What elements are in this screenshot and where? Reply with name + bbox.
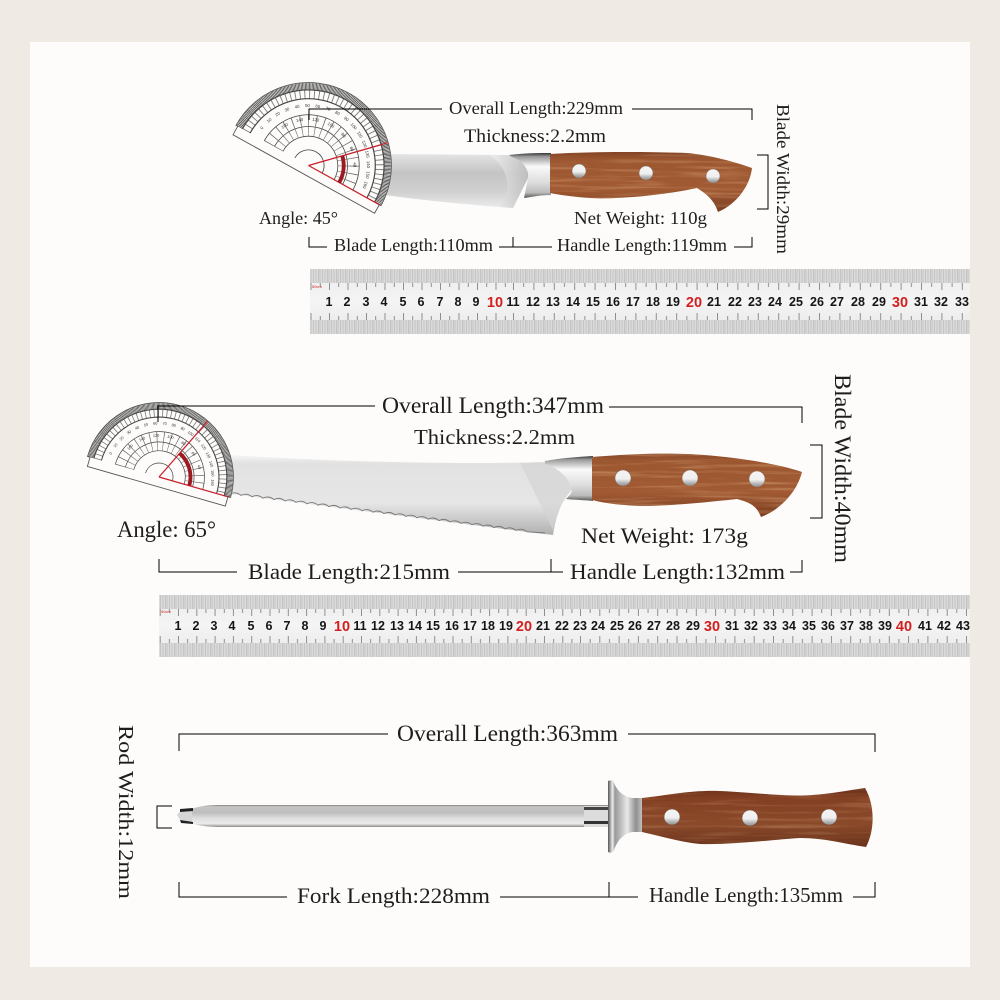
protractor 2: 65 degree: 140	[138, 436, 146, 442]
protractor 1: 45 degree: 60	[315, 103, 321, 109]
ruler 1 numbers: 11	[506, 295, 520, 309]
ruler 1 numbers: 28	[851, 295, 865, 309]
protractor 2: 65 degree: 130	[205, 451, 211, 459]
ruler 2 numbers: 5	[248, 619, 255, 633]
ruler 1 numbers: 26	[810, 295, 824, 309]
ruler 1 numbers: 1	[326, 295, 333, 309]
guard	[608, 780, 643, 853]
protractor 1: 45 degree: 60	[349, 146, 355, 153]
handle	[592, 454, 802, 517]
ruler 2 numbers: 33	[763, 619, 777, 633]
ruler 2 numbers: 2	[193, 619, 200, 633]
ruler 1 numbers: 18	[646, 295, 660, 309]
ruler 1	[310, 269, 970, 334]
knife 2: bread knife photo	[228, 450, 804, 535]
ruler 2 numbers: 37	[840, 619, 854, 633]
ruler 1 numbers: 10	[487, 295, 503, 311]
protractor 1: 45 degree: 80	[340, 132, 347, 139]
protractor 1: 45 degree: 10	[266, 116, 273, 124]
protractor 2: 65 degree	[85, 385, 251, 507]
ruler 1 numbers: 7	[437, 295, 444, 309]
ruler 2 numbers: 21	[536, 619, 550, 633]
protractor 1: 45 degree: 160	[280, 121, 290, 130]
annotations knife 2: Net Weight: 173g	[581, 523, 748, 548]
ruler 1 numbers: 6	[418, 295, 425, 309]
annotations honing rod: Handle Length:135mm	[649, 883, 843, 907]
annotations knife 2: Angle: 65°	[117, 517, 216, 542]
ruler 1 numbers: 24	[768, 295, 782, 309]
ruler 1 numbers: 32	[934, 295, 948, 309]
ruler 2 numbers: 11	[353, 619, 367, 633]
ruler 2 numbers: 26	[628, 619, 642, 633]
annotations knife 1: Overall Length:229mm	[449, 98, 623, 118]
ruler 2 numbers: 41	[918, 619, 932, 633]
protractor 1: 45 degree: 140	[366, 161, 371, 169]
ruler 2 numbers: 27	[647, 619, 661, 633]
annotations honing rod: Rod Width:12mm	[114, 725, 138, 899]
ruler 2 numbers: 43	[956, 619, 970, 633]
ruler 2: 50cm	[161, 609, 171, 614]
protractor 1: 45 degree: 80	[334, 110, 341, 117]
serration	[230, 493, 545, 533]
protractor 1: 45 degree: 40	[352, 162, 357, 168]
annotations knife 1: Blade Width:29mm	[773, 104, 793, 254]
ruler 1 numbers: 31	[914, 295, 928, 309]
ruler 2 numbers: 3	[211, 619, 218, 633]
rod tip	[177, 808, 192, 824]
protractor 2: 65 degree: 80	[180, 441, 186, 447]
protractor 1: 45 degree: 50	[305, 103, 310, 108]
ruler 2 numbers: 8	[302, 619, 309, 633]
annotations knife 2: Overall Length:347mm	[382, 393, 604, 418]
ruler 2 numbers: 29	[686, 619, 700, 633]
ruler 1 numbers: 14	[566, 295, 580, 309]
ruler 1 numbers: 16	[606, 295, 620, 309]
ruler 2 numbers: 13	[390, 619, 404, 633]
ruler 1 numbers: 30	[892, 295, 908, 311]
ruler 2 numbers: 16	[445, 619, 459, 633]
ruler 1 numbers: 5	[400, 295, 407, 309]
protractor 2: 65 degree: 110	[194, 436, 201, 443]
protractor 2: 65 degree: 160	[127, 444, 134, 451]
ruler 2 numbers: 42	[937, 619, 951, 633]
ruler 2 numbers: 14	[408, 619, 422, 633]
protractor 2: 65 degree: 0	[109, 452, 113, 455]
annotations knife 2: Thickness:2.2mm	[414, 425, 575, 449]
ruler 1 numbers: 13	[546, 295, 560, 309]
protractor 1: 45 degree: 150	[365, 171, 371, 179]
ruler 2 numbers: 36	[821, 619, 835, 633]
ruler 2 numbers: 18	[481, 619, 495, 633]
protractor 1: 45 degree: 20	[274, 110, 281, 117]
ruler 1 numbers: 19	[666, 295, 680, 309]
protractor 2: 65 degree: 100	[187, 430, 194, 437]
protractor 2: 65 degree: 20	[119, 436, 125, 441]
protractor 2: 65 degree: 60	[153, 421, 158, 426]
ruler 2 numbers: 40	[896, 619, 912, 635]
ruler 1 numbers: 20	[686, 295, 702, 311]
rivets	[664, 809, 837, 826]
protractor 2: 65 degree: 10	[113, 443, 119, 448]
bevel	[490, 155, 528, 208]
ruler 1 numbers: 23	[748, 295, 762, 309]
protractor 2: 65 degree: 80	[171, 423, 176, 428]
rod shaft	[191, 805, 610, 827]
handle	[550, 150, 755, 215]
ruler 1 numbers: 25	[789, 295, 803, 309]
protractor 1: 45 degree	[231, 53, 421, 214]
annotations knife 1	[259, 98, 793, 255]
annotations knife 2: Blade Length:215mm	[248, 559, 450, 584]
protractor 2: 65 degree: 70	[162, 422, 167, 426]
ruler 2 numbers: 22	[555, 619, 569, 633]
ruler 1 numbers: 12	[526, 295, 540, 309]
ruler 2 numbers: 20	[516, 619, 532, 635]
ruler 1 numbers: 17	[626, 295, 640, 309]
blade	[375, 154, 528, 208]
red angle marker	[308, 114, 408, 205]
ruler 2 numbers: 30	[704, 619, 720, 635]
protractor 1: 45 degree: 120	[361, 140, 368, 149]
protractor 2: 65 degree: 30	[126, 430, 132, 436]
ruler 1 numbers: 8	[455, 295, 462, 309]
ruler 1 numbers: 9	[473, 295, 480, 309]
protractor 2: 65 degree: 60	[190, 451, 196, 457]
protractor 2: 65 degree: 150	[210, 470, 215, 477]
bolster	[545, 456, 593, 501]
ruler 2 numbers: 38	[859, 619, 873, 633]
red angle marker	[159, 412, 247, 497]
protractor 2: 65 degree: 160	[210, 479, 215, 486]
protractor 2: 65 degree: 120	[200, 443, 207, 451]
ruler 2 numbers: 9	[320, 619, 327, 633]
ruler 2 numbers: 4	[229, 619, 236, 633]
ruler 2 numbers: 1	[175, 619, 182, 633]
ruler 1 numbers: 3	[363, 295, 370, 309]
ruler 1 numbers: 21	[707, 295, 721, 309]
rivets	[615, 470, 765, 487]
serrated blade	[228, 455, 572, 535]
annotations knife 1: Net Weight: 110g	[574, 208, 707, 228]
protractor 1: 45 degree: 110	[356, 130, 364, 139]
ruler 2	[159, 595, 970, 657]
ruler 2 numbers: 19	[499, 619, 513, 633]
ruler 1 numbers: 22	[728, 295, 742, 309]
protractor 1: 45 degree: 100	[327, 121, 336, 129]
ruler 1 numbers: 2	[344, 295, 351, 309]
annotations knife 1: Angle: 45°	[259, 208, 338, 228]
protractor 2: 65 degree: 40	[197, 464, 201, 470]
ruler 1 numbers: 27	[830, 295, 844, 309]
annotations honing rod: Overall Length:363mm	[397, 721, 618, 746]
ruler 2 numbers: 34	[782, 619, 796, 633]
ruler 1 numbers: 29	[872, 295, 886, 309]
ruler 2 numbers: 17	[463, 619, 477, 633]
ruler 2 numbers: 7	[284, 619, 291, 633]
annotations knife 1: Thickness:2.2mm	[464, 126, 606, 147]
annotations knife 2: Blade Width:40mm	[830, 374, 855, 563]
ruler 2 numbers: 24	[591, 619, 605, 633]
protractor 2: 65 degree: 120	[153, 434, 159, 438]
ruler 2 numbers: 6	[266, 619, 273, 633]
protractor 1: 45 degree: 120	[312, 117, 320, 123]
annotations knife 2	[117, 374, 855, 584]
ruler 2 numbers: 28	[666, 619, 680, 633]
protractor 1: 45 degree: 100	[350, 122, 358, 131]
annotations knife 2: Handle Length:132mm	[570, 559, 785, 584]
ruler 1 numbers: 4	[381, 295, 388, 309]
annotations knife 1: Handle Length:119mm	[557, 235, 727, 255]
rivets	[572, 164, 720, 183]
ruler 1 numbers: 33	[955, 295, 969, 309]
ruler 2 numbers	[175, 619, 970, 635]
ruler 1 numbers	[326, 295, 969, 311]
ruler 2 numbers: 10	[334, 619, 350, 635]
knife 1: paring knife photo	[386, 152, 752, 212]
ruler 2 numbers: 23	[573, 619, 587, 633]
protractor 2: 65 degree: 90	[180, 426, 185, 432]
ruler 2 numbers: 39	[878, 619, 892, 633]
ruler 1 numbers: 15	[586, 295, 600, 309]
handle	[642, 788, 873, 847]
ruler 2 numbers: 25	[610, 619, 624, 633]
protractor 1: 45 degree: 0	[259, 125, 265, 130]
protractor 2: 65 degree: 50	[143, 423, 149, 428]
protractor 2: 65 degree: 140	[208, 460, 214, 468]
annotations honing rod	[114, 721, 875, 908]
blade bevel	[520, 462, 572, 530]
ruler 2 numbers: 32	[744, 619, 758, 633]
annotations knife 1: Blade Length:110mm	[334, 235, 493, 255]
ruler 2 numbers: 15	[426, 619, 440, 633]
annotations honing rod: Fork Length:228mm	[297, 883, 490, 908]
protractor 1: 45 degree: 90	[343, 115, 350, 123]
protractor 1: 45 degree: 30	[284, 106, 291, 113]
rod collar	[584, 806, 609, 827]
protractor 1: 45 degree: 140	[296, 117, 304, 123]
protractor 2: 65 degree: 100	[167, 435, 174, 440]
protractor 2: 65 degree: 40	[134, 425, 140, 431]
bolster	[509, 153, 551, 198]
protractor 1: 45 degree: 70	[325, 106, 332, 112]
protractor 1: 45 degree: 160	[362, 181, 369, 190]
honing rod photo	[177, 780, 877, 853]
ruler 2 numbers: 31	[725, 619, 739, 633]
protractor 1: 45 degree: 40	[294, 104, 300, 110]
ruler 2 numbers: 35	[802, 619, 816, 633]
protractor 1: 45 degree: 130	[364, 150, 371, 159]
ruler 2 numbers: 12	[371, 619, 385, 633]
ruler 1: 50cm	[312, 284, 322, 289]
